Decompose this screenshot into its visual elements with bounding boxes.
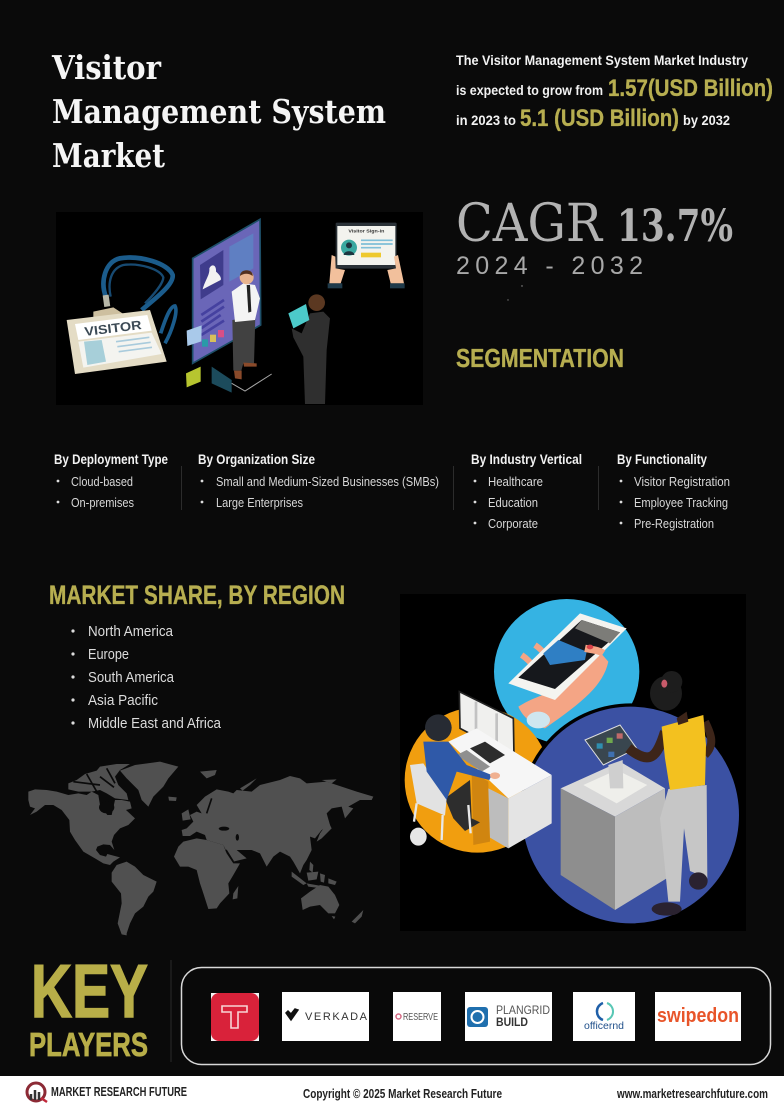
key players logo panel	[182, 968, 770, 1064]
footer logo: MARKET RESEARCH FUTURE	[51, 1085, 187, 1099]
illustration: visitor sign-in: Visitor Sign-in	[348, 228, 384, 233]
key players heading: PLAYERS	[29, 1026, 148, 1063]
segment: by functionality: Employee Tracking	[634, 495, 728, 510]
market size summary text: in 2023 to	[456, 112, 516, 128]
CAGR figure: CAGR	[456, 194, 604, 254]
segment: by functionality: Pre-Registration	[634, 516, 714, 531]
segment: by functionality: By Functionality	[617, 451, 707, 467]
market size summary text	[456, 52, 773, 132]
segment: by industry vertical: Corporate	[488, 516, 538, 531]
segment: by industry vertical: By Industry Vertical	[471, 451, 582, 467]
title	[51, 48, 386, 175]
illustration: visitor check-in methods	[400, 594, 746, 931]
region list: Asia Pacific	[88, 692, 158, 709]
segment: by organization size: Small and Medium-Sized Businesses (SMBs)	[216, 474, 439, 489]
key players heading: KEY	[31, 949, 148, 1033]
market share heading: MARKET SHARE, BY REGION	[49, 580, 345, 610]
logo: PlanGrid Build: BUILD	[496, 1017, 528, 1029]
CAGR figure: 13.7%	[617, 201, 733, 252]
logo: swipedon: swipedon	[657, 1005, 739, 1027]
logo: Reserve: RESERVE	[403, 1012, 438, 1023]
segmentation heading: SEGMENTATION	[456, 343, 624, 373]
market size summary text: by 2032	[683, 112, 730, 128]
segment: by functionality: Visitor Registration	[634, 474, 730, 489]
illustration: visitor sign-in: VISITOR	[84, 318, 142, 339]
segment: by deployment type: On-premises	[71, 495, 134, 510]
logo: swipedon	[655, 992, 741, 1041]
CAGR figure	[456, 194, 733, 301]
segment: by deployment type	[54, 451, 168, 510]
logo: Verkada	[282, 992, 369, 1041]
logo: officernd	[573, 992, 635, 1041]
region list: Middle East and Africa	[88, 715, 222, 732]
market size summary text: The Visitor Management System Market Industry	[456, 52, 748, 68]
footer	[0, 1076, 784, 1108]
title: Market	[52, 136, 166, 175]
market size summary text: 5.1 (USD Billion)	[520, 105, 679, 132]
logo: officernd: officernd	[584, 1020, 624, 1032]
segment: by industry vertical: Education	[488, 495, 538, 510]
region list: South America	[88, 669, 175, 686]
logo: PlanGrid Build	[465, 992, 552, 1041]
market size summary text: is expected to grow from	[456, 82, 603, 98]
logo: Reserve	[393, 992, 441, 1041]
logo: Verkada: VERKADA	[305, 1011, 368, 1023]
logo: PlanGrid Build: PLANGRID	[496, 1003, 550, 1017]
footer logo	[27, 1083, 187, 1102]
segment: by industry vertical	[471, 451, 582, 531]
key players heading	[29, 949, 148, 1063]
copyright: Copyright © 2025 Market Research Future	[303, 1087, 502, 1101]
segment: by organization size: Large Enterprises	[216, 495, 303, 510]
logo: T	[211, 993, 259, 1041]
segment: by deployment type: By Deployment Type	[54, 451, 168, 467]
segment: by organization size: By Organization Size	[198, 451, 315, 467]
CAGR figure: 2024 - 2032	[456, 252, 643, 280]
segment: by organization size	[198, 451, 439, 510]
region list: North America	[88, 623, 174, 640]
region list	[71, 623, 222, 732]
region list: Europe	[88, 646, 129, 663]
world map	[28, 762, 373, 935]
segment: by industry vertical: Healthcare	[488, 474, 543, 489]
segment: by deployment type: Cloud-based	[71, 474, 133, 489]
segment: by functionality	[617, 451, 730, 531]
title: Visitor	[51, 48, 162, 87]
title: Management System	[52, 92, 386, 131]
illustration: visitor sign-in	[56, 212, 423, 405]
